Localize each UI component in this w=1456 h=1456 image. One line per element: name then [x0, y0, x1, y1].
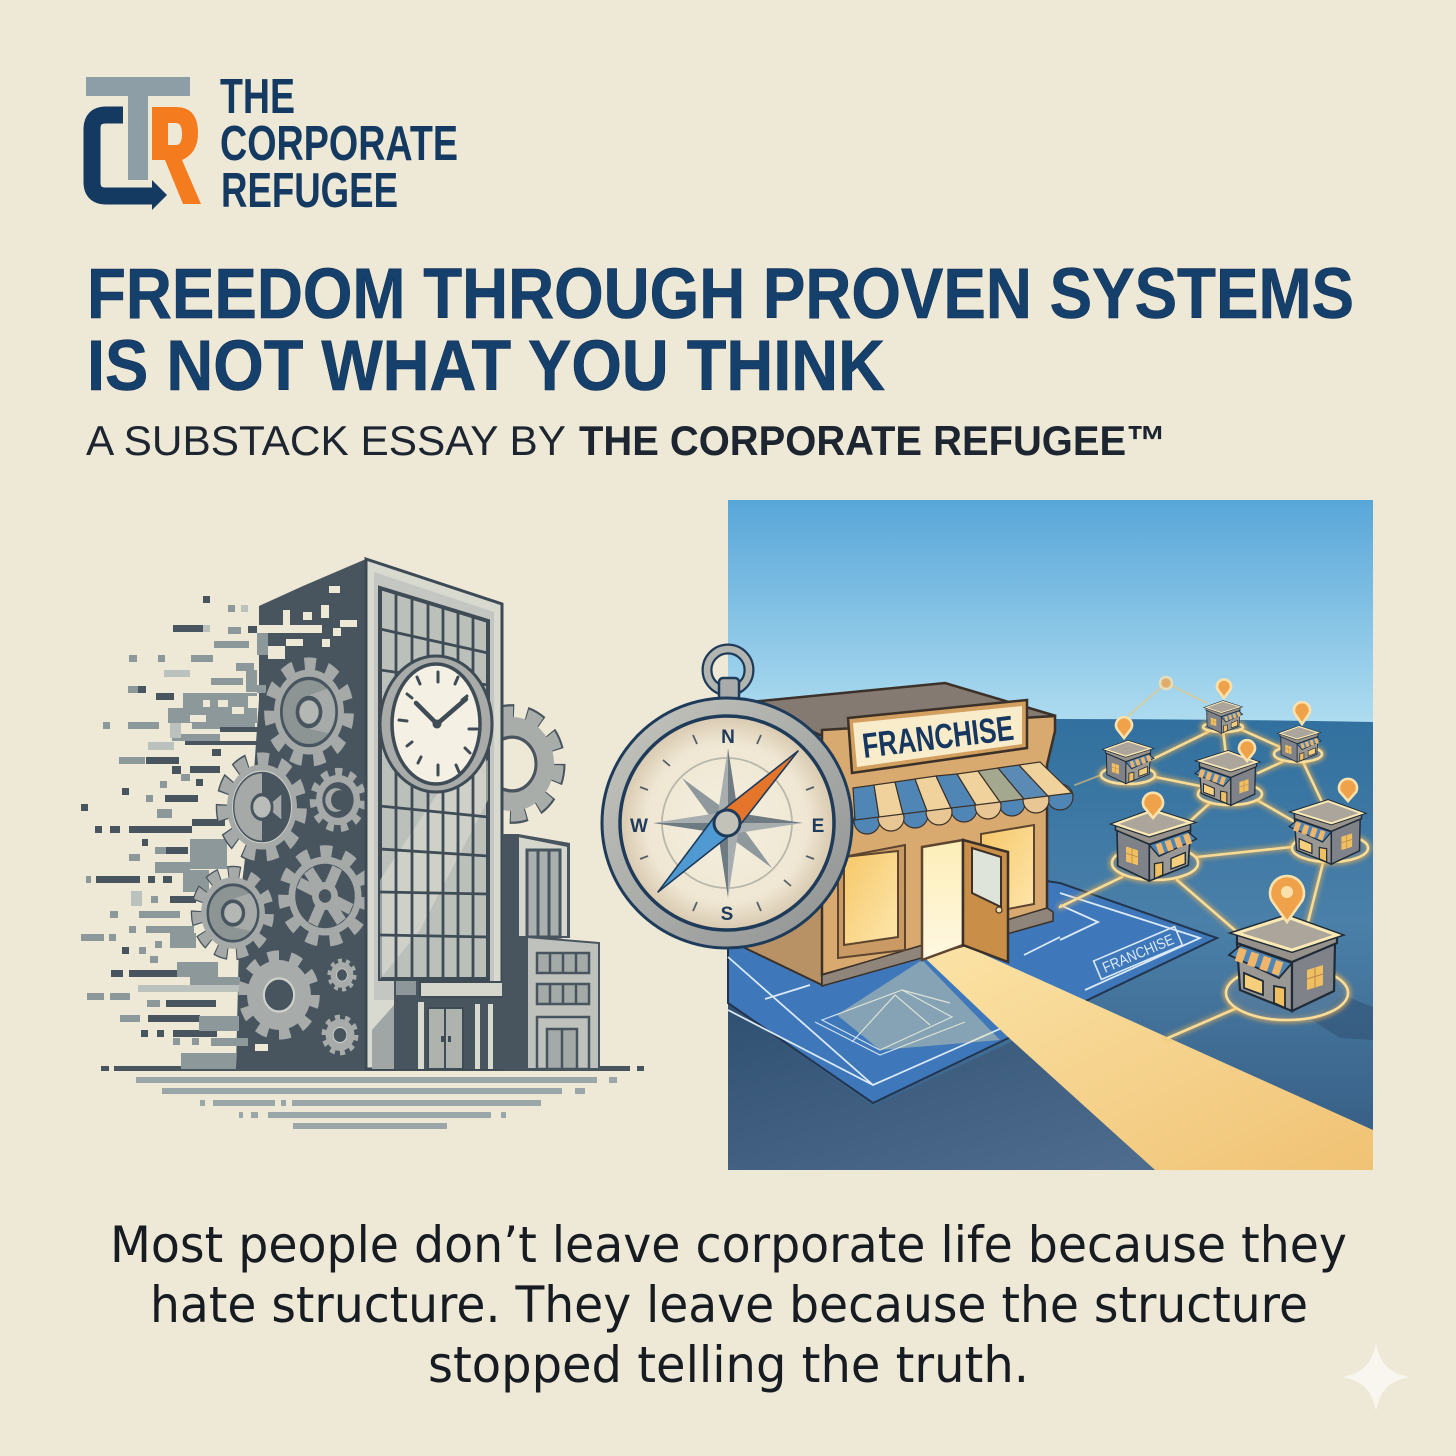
tower clock — [380, 656, 492, 792]
closing statement: Most people don’t leave corporate life because they — [110, 1216, 1347, 1274]
tower dark side — [236, 559, 370, 1069]
main franchise store — [735, 683, 1073, 986]
network links — [1060, 683, 1323, 1038]
compass — [602, 649, 852, 948]
subtitle: A SUBSTACK ESSAY BY — [86, 417, 566, 464]
franchise network — [1060, 677, 1368, 1038]
compass needle — [658, 751, 798, 892]
dissolving pixels — [81, 586, 357, 1069]
gears — [198, 665, 558, 1053]
ground lines — [101, 1066, 644, 1129]
ground — [728, 719, 1373, 1170]
store ground rings — [1101, 722, 1368, 1020]
sky — [728, 500, 1373, 722]
blueprint label: FRANCHISE — [1100, 931, 1177, 977]
compass letters: S — [721, 904, 733, 925]
blueprint sheet — [728, 860, 1217, 1103]
open doorway — [922, 840, 963, 960]
closing statement: stopped telling the truth. — [428, 1336, 1029, 1394]
store roof — [750, 683, 1056, 735]
location pins — [1116, 677, 1357, 922]
franchise sign — [848, 700, 1027, 773]
closing statement: hate structure. They leave because the structure — [150, 1276, 1308, 1334]
store side wall — [735, 760, 822, 985]
closing statement — [110, 1216, 1347, 1394]
compass letters: N — [721, 727, 735, 748]
dark foreground — [728, 1003, 1373, 1170]
logo: The Corporate Refugee — [86, 70, 458, 218]
side buildings — [502, 834, 599, 1069]
franchise sign: FRANCHISE — [860, 709, 1016, 766]
compass rose — [653, 748, 803, 898]
compass face — [620, 716, 834, 930]
sparkle watermark — [1342, 1343, 1410, 1411]
tower front — [366, 559, 510, 1069]
compass letters: E — [812, 816, 824, 837]
striped awning — [853, 762, 1073, 834]
compass bezel — [602, 698, 852, 948]
entrance canopy and doors — [372, 981, 510, 1069]
logo mark: CTR monogram — [86, 77, 201, 210]
compass letters — [630, 727, 824, 925]
compass letters: W — [630, 816, 648, 837]
network stores — [1106, 701, 1362, 1011]
light beam path — [925, 945, 1373, 1170]
light cone on blueprint — [837, 960, 1000, 1050]
logo wordmark: CORPORATE — [220, 117, 458, 171]
logo wordmark: THE — [220, 70, 295, 124]
title: IS NOT WHAT YOU THINK — [87, 327, 885, 406]
shop windows — [838, 825, 1034, 958]
store shadow — [1312, 995, 1373, 1040]
title — [87, 255, 1354, 406]
logo wordmark — [220, 70, 458, 218]
illustration: franchise panel — [728, 500, 1373, 1170]
illustration: dissolving corporate tower — [81, 559, 644, 1129]
subtitle — [86, 417, 1166, 464]
compass ring loop — [707, 649, 749, 700]
gear behind tower right — [466, 712, 558, 816]
compass ticks — [640, 735, 814, 911]
store front wall — [822, 716, 1055, 975]
logo wordmark: REFUGEE — [221, 164, 398, 218]
door leaf — [963, 840, 1008, 962]
subtitle: THE CORPORATE REFUGEE™ — [579, 417, 1166, 464]
